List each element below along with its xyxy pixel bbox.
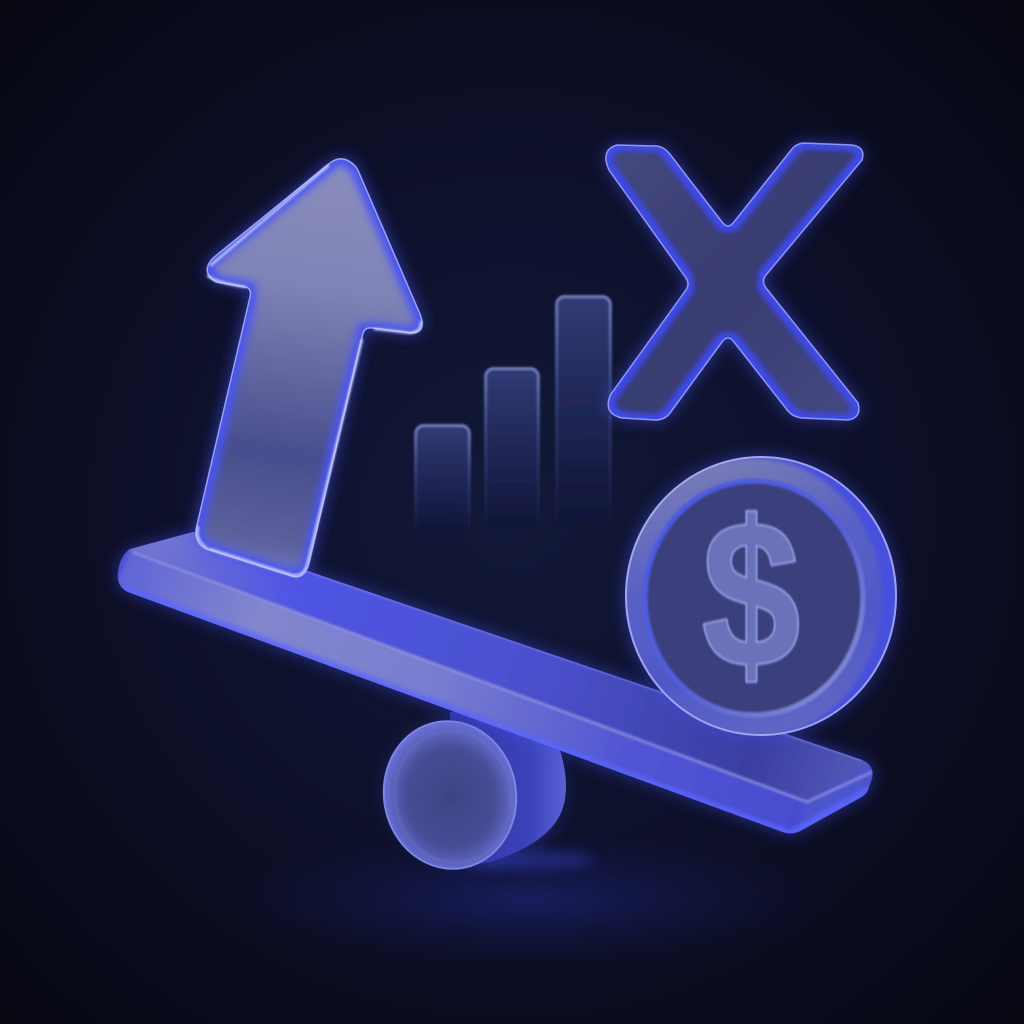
plank back edge: [193, 532, 862, 760]
cylinder fulcrum: [372, 711, 567, 879]
coin edge: [625, 456, 897, 736]
plank front face: [110, 551, 807, 845]
cylinder body: [450, 711, 566, 868]
icon: up arrow: [196, 159, 422, 577]
bar 2: [486, 368, 538, 530]
cylinder face: [372, 711, 528, 879]
coin outline: [626, 457, 896, 735]
bar 3: [556, 296, 610, 528]
coin rim: [622, 458, 882, 738]
bar chart: [416, 296, 610, 536]
plank top face: [125, 525, 880, 802]
plank body: [118, 532, 873, 834]
dollar sign: $: [702, 477, 800, 710]
arrow edge highlight: [196, 159, 422, 577]
seesaw plank: [108, 524, 882, 843]
icon: multiply X: [606, 143, 863, 420]
plank ridge highlight: [132, 552, 872, 802]
plank lower blue edge: [124, 590, 870, 835]
floor glow: [230, 834, 830, 966]
cylinder glow: [383, 712, 567, 868]
bar 1: [416, 426, 470, 536]
arrow bright highlights: [197, 166, 421, 575]
cylinder inner ring: [384, 722, 522, 872]
icon: dollar coin: [622, 456, 897, 738]
plank end face: [800, 770, 873, 832]
coin face: [645, 481, 863, 715]
